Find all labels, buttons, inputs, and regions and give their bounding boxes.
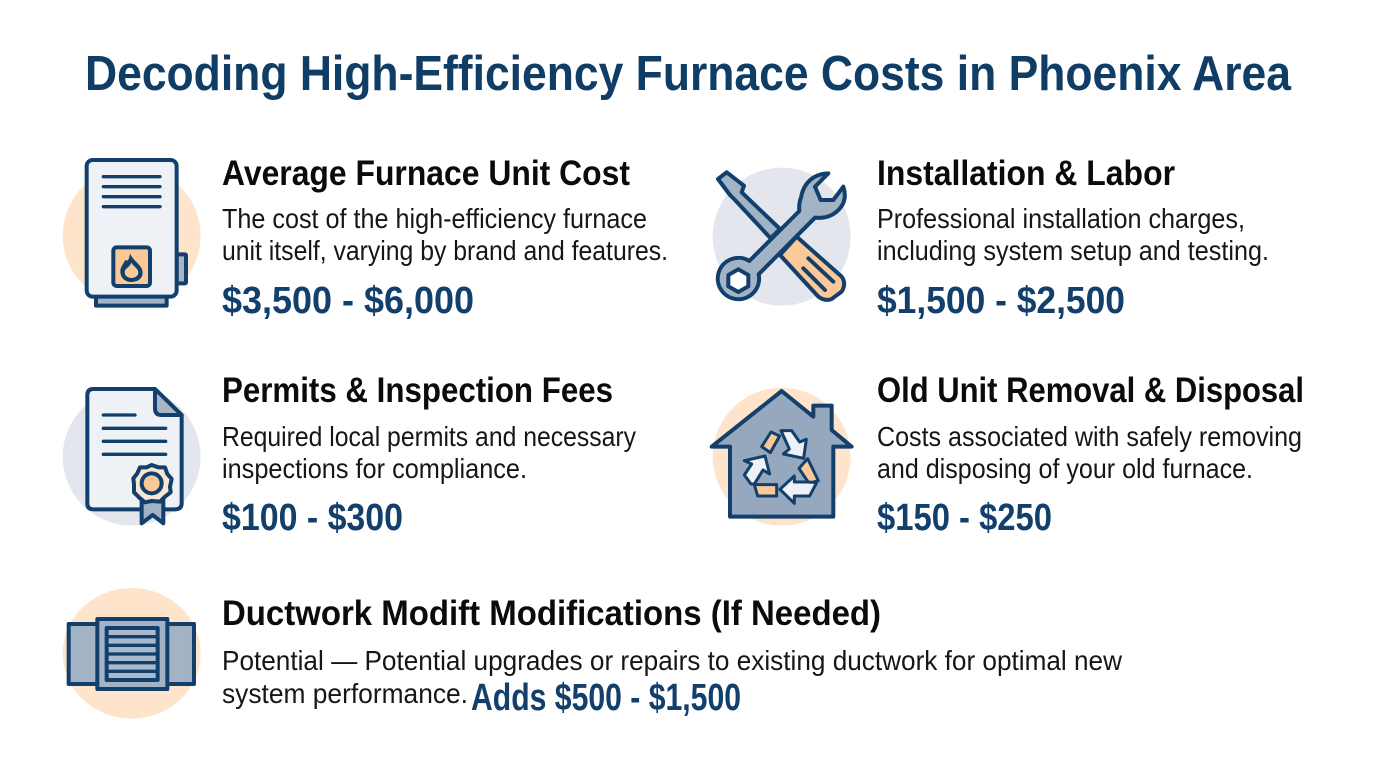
price: $3,500 - $6,000 xyxy=(222,280,474,322)
description: Professional installation charges, xyxy=(877,203,1245,234)
panel: permits and inspection fees xyxy=(63,371,636,539)
description: unit itself, varying by brand and features. xyxy=(222,235,668,266)
panel: ductwork modifications xyxy=(63,588,1123,719)
title: Decoding High-Efficiency Furnace Costs in Phoenix Area xyxy=(85,47,1292,101)
icon: crossed wrench and screwdriver xyxy=(713,168,851,306)
panel: old unit removal and disposal xyxy=(712,371,1304,539)
icon: permit document with seal xyxy=(63,388,201,526)
price: $150 - $250 xyxy=(877,497,1052,539)
heading: Installation & Labor xyxy=(877,154,1175,193)
description: and disposing of your old furnace. xyxy=(877,453,1253,484)
icon: house with recycling arrows xyxy=(712,388,852,526)
description: inspections for compliance. xyxy=(222,453,527,484)
heading: Permits & Inspection Fees xyxy=(222,371,613,410)
heading: Old Unit Removal & Disposal xyxy=(877,371,1304,410)
icon: duct section with grille xyxy=(63,588,201,719)
panel: installation and labor xyxy=(713,154,1269,322)
description: The cost of the high-efficiency furnace xyxy=(222,203,647,234)
price: $1,500 - $2,500 xyxy=(877,280,1125,322)
icon: furnace xyxy=(63,160,201,306)
description: including system setup and testing. xyxy=(877,235,1269,266)
description: Potential — Potential upgrades or repairs to existing ductwork for optimal new xyxy=(222,645,1123,676)
description: Costs associated with safely removing xyxy=(877,421,1302,452)
panel: average furnace unit cost xyxy=(63,154,668,322)
heading: Average Furnace Unit Cost xyxy=(222,154,630,193)
description: Required local permits and necessary xyxy=(222,421,636,452)
price: Adds $500 - $1,500 xyxy=(471,677,741,719)
description: system performance. xyxy=(222,678,468,709)
price: $100 - $300 xyxy=(222,497,403,539)
heading: Ductwork Modift Modifications (If Needed) xyxy=(222,594,881,633)
